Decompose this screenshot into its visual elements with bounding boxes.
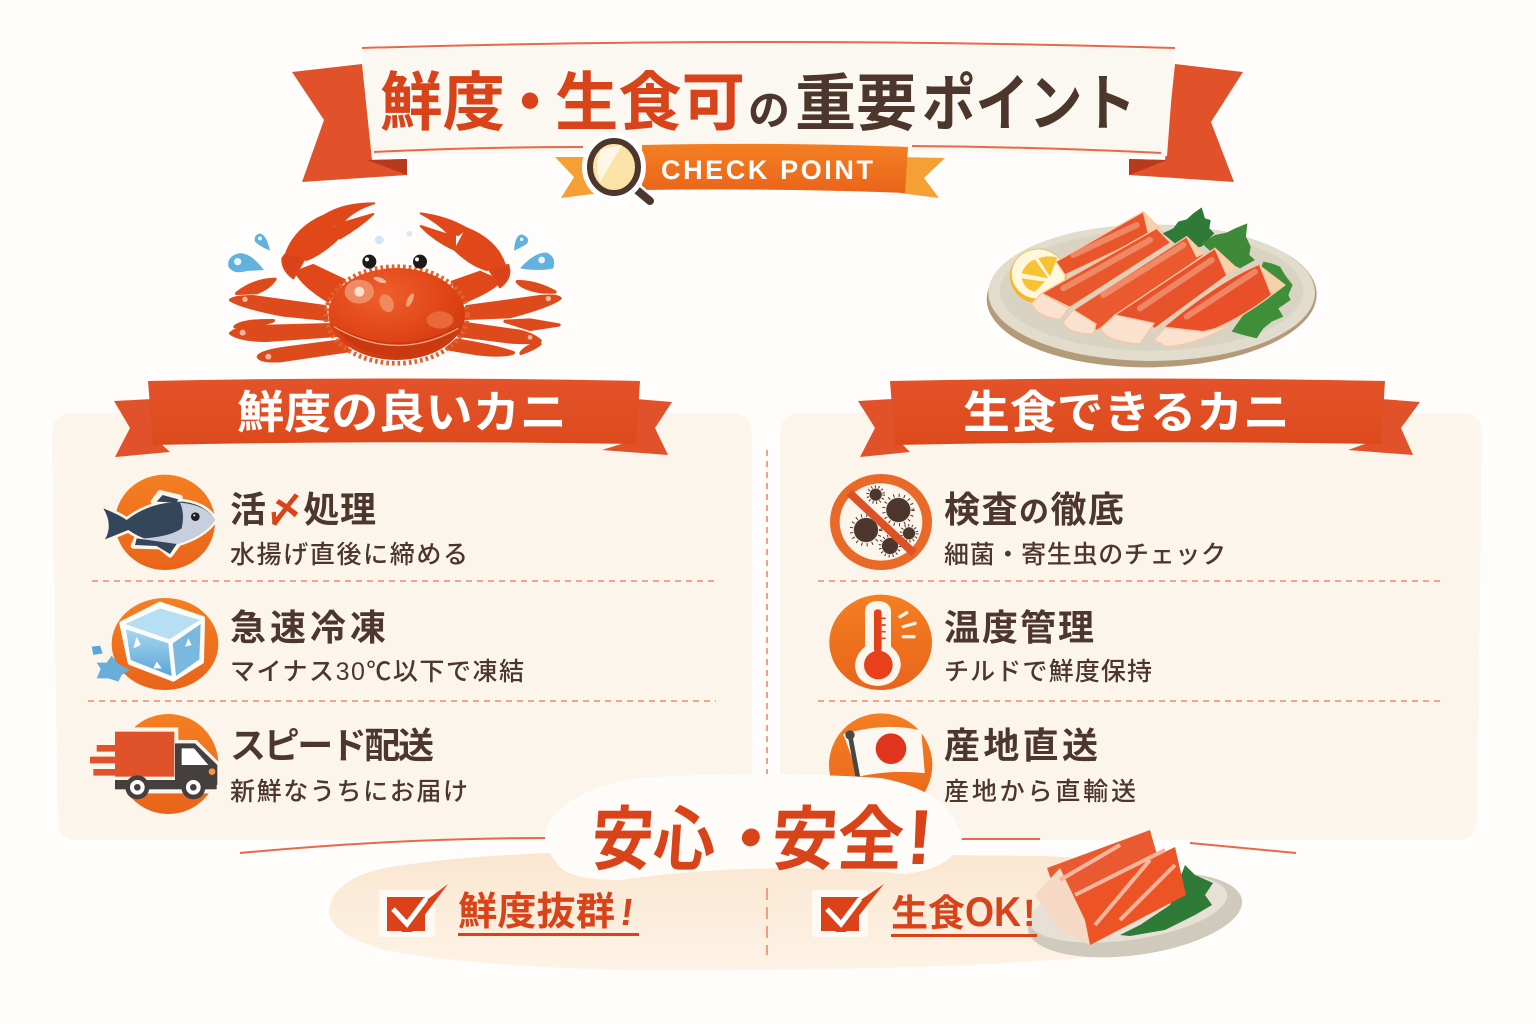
plate <box>985 223 1318 370</box>
lemon slice <box>1010 249 1067 303</box>
white cloud heading <box>545 774 962 880</box>
description: 水揚げ直後に締める <box>230 541 468 569</box>
title text: の <box>748 87 790 134</box>
icon: no germs <box>830 474 932 570</box>
heading ribbon: fresh crab <box>114 378 672 457</box>
check point label: CHECK POINT <box>661 155 874 185</box>
icon: thermometer <box>829 595 932 690</box>
text: temperature control <box>944 607 1152 686</box>
check item: raw OK: OK <box>965 888 1021 935</box>
icon: japan flag <box>829 713 932 817</box>
water droplets <box>228 231 554 272</box>
title banner <box>292 42 1243 182</box>
right claw <box>421 213 509 303</box>
check item: raw OK <box>812 884 1037 937</box>
panel: fresh crab <box>52 413 752 840</box>
icon: ice cube <box>92 598 218 690</box>
description: 新鮮なうちにお届け <box>230 778 468 806</box>
text: speed delivery <box>230 725 468 806</box>
crab legs <box>231 279 560 361</box>
description: 産地から直輸送 <box>944 778 1136 806</box>
icon: magnifying glass <box>586 137 650 202</box>
text: speed delivery: スピード配送 <box>230 725 434 766</box>
check point ribbon <box>555 137 945 202</box>
crab eyes <box>362 255 427 269</box>
leg highlights <box>240 296 551 360</box>
description: チルドで鮮度保持 <box>944 658 1152 686</box>
text: direct from origin <box>944 725 1136 806</box>
text: ikejime <box>230 489 468 569</box>
check item: outstanding freshness: ! <box>618 891 636 934</box>
title text <box>380 67 1136 139</box>
heading text: 生食できるカニ <box>963 387 1290 438</box>
illustration: small crab plate <box>1022 830 1248 970</box>
right ribbon tail <box>1129 64 1243 182</box>
title text: 重要 <box>795 70 917 139</box>
shiso leaves <box>1163 207 1293 338</box>
description: 細菌・寄生虫のチェック <box>944 541 1226 569</box>
crab meat rolls <box>1032 212 1285 347</box>
text: quick freezing: 急速冷凍 <box>230 607 386 648</box>
text: ikejime: 活〆処理 <box>230 489 376 530</box>
meat highlights <box>1063 225 1255 317</box>
illustration: crab leg plate <box>985 207 1318 370</box>
description: マイナス30℃以下で凍結 <box>230 658 524 686</box>
banner body <box>362 44 1175 156</box>
beige blob <box>329 852 1200 970</box>
heading: peace of mind <box>589 793 936 881</box>
heading: peace of mind: 安全 <box>769 801 906 879</box>
check item: raw OK: 生食 <box>891 893 965 934</box>
check item: outstanding freshness <box>379 884 639 937</box>
heading: peace of mind: ! <box>904 793 936 881</box>
crab shell <box>326 267 467 363</box>
text: temperature control: 温度管理 <box>944 607 1094 648</box>
text: inspection <box>944 489 1226 569</box>
left ribbon tail <box>292 64 407 182</box>
title text: ポイント <box>922 70 1136 139</box>
bottom summary band <box>240 774 1296 970</box>
heading ribbon: raw edible crab <box>858 378 1420 457</box>
icon: delivery truck <box>90 714 222 814</box>
title text: ・ <box>498 67 562 139</box>
heading: peace of mind: 安心 <box>589 801 718 879</box>
icon: crab <box>228 203 560 363</box>
heading: peace of mind: ・ <box>713 801 788 879</box>
title text: 生食可 <box>555 67 745 139</box>
text: direct from origin: 産地直送 <box>944 725 1098 766</box>
icon: fish <box>103 475 215 570</box>
text: inspection: 検査の徹底 <box>944 489 1124 530</box>
check item: outstanding freshness: 鮮度抜群 <box>458 891 615 934</box>
heading text: 鮮度の良いカニ <box>237 387 567 438</box>
check item: raw OK: ! <box>1023 893 1036 935</box>
left claw <box>282 203 374 302</box>
title text: 鮮度 <box>380 67 505 139</box>
text: quick freezing <box>230 607 524 686</box>
panel: raw edible crab <box>780 413 1482 840</box>
